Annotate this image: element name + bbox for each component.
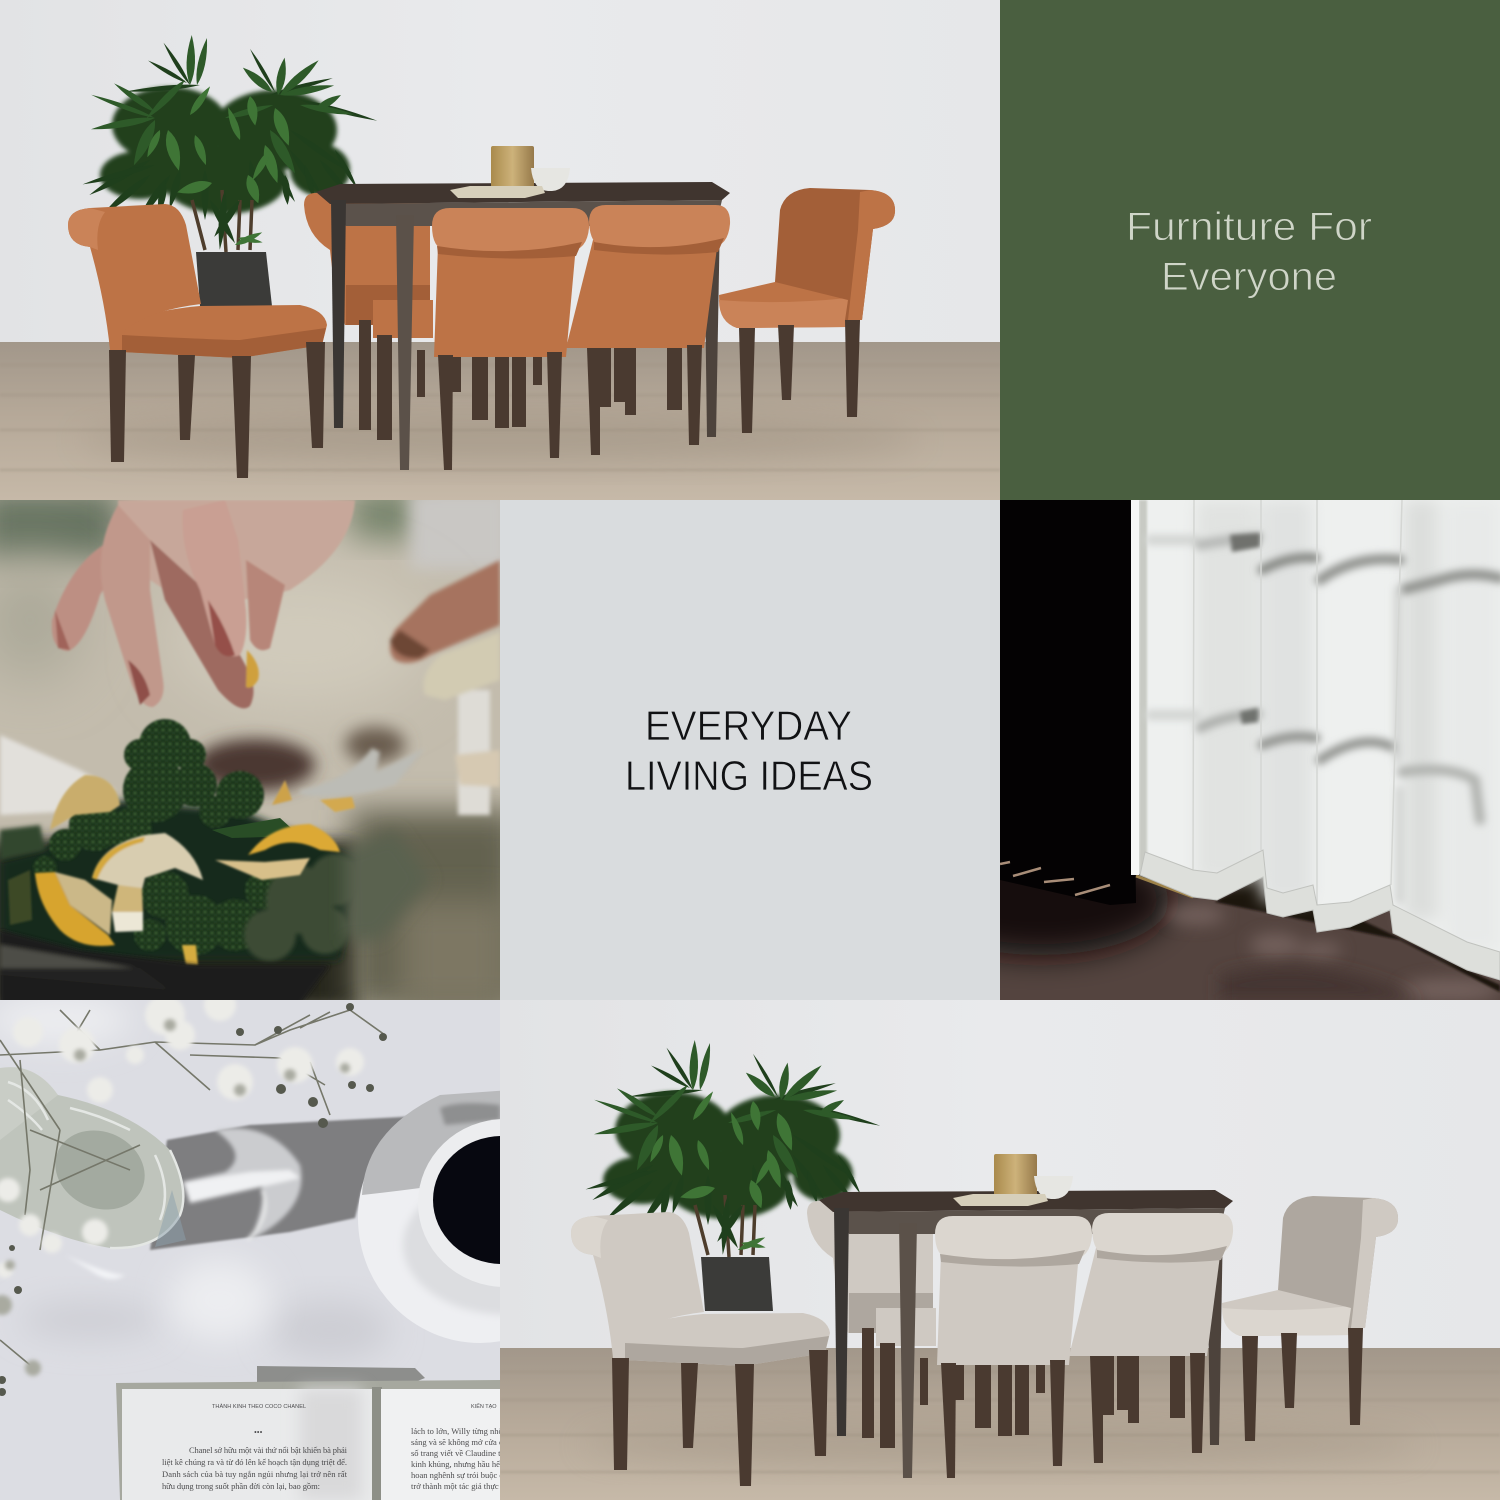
book cover shadow <box>257 1366 425 1382</box>
heading: furniture for everyone: Everyone <box>1161 255 1337 299</box>
panel: curtain photo <box>1000 500 1500 1000</box>
panel: grey title block <box>500 500 1000 1000</box>
flower buds <box>0 1003 387 1396</box>
panel: green title block <box>1000 0 1500 500</box>
food: herbs <box>0 719 430 961</box>
icon: potted plant <box>585 1040 881 1311</box>
carpet shading <box>1000 874 1186 974</box>
panel: food photo <box>0 490 520 1010</box>
book text: liệt kê chúng ra và từ đó lên kế hoạch tận dụng triệt để. <box>162 1457 347 1467</box>
book text: THÀNH KINH THEO COCO CHANEL <box>212 1403 306 1410</box>
icon: glass vase <box>0 1067 186 1248</box>
branches <box>0 1010 385 1365</box>
light caustic <box>182 1128 301 1240</box>
icon: second hand <box>390 560 500 815</box>
panel: book and coffee photo <box>0 1000 500 1500</box>
gold threshold <box>1136 876 1193 897</box>
sheer curtain <box>1131 500 1500 980</box>
baby's breath flowers <box>0 989 364 1278</box>
heading: everyday living ideas <box>625 702 873 799</box>
leather chairs and table <box>68 146 895 478</box>
curtain hem <box>1140 850 1500 980</box>
fork <box>300 748 425 796</box>
book text: kinh khủng, nhưng hầu hết các <box>411 1459 516 1469</box>
dark curtain <box>1000 500 1136 905</box>
book text: Danh sách của bà tuy ngắn ngủi nhưng lại trở nên rất <box>162 1469 348 1479</box>
book text: ••• <box>254 1428 263 1437</box>
book text: trở thành một tác giả thực <box>411 1481 499 1491</box>
panel: fabric dining set photo <box>500 1000 1500 1500</box>
book text <box>162 1403 517 1491</box>
fabric chairs and table <box>571 1154 1398 1486</box>
gap under curtain <box>1215 875 1500 992</box>
heading: furniture for everyone: Furniture For <box>1126 205 1372 249</box>
heading: furniture for everyone <box>1126 205 1372 299</box>
icon: coffee cup on saucer <box>358 1090 500 1343</box>
dark pan <box>0 930 330 1005</box>
book text: lách to lớn, Willy từng nhốt <box>411 1426 506 1436</box>
book text: KIẾN TẠO <box>471 1403 497 1410</box>
book text: hoan nghênh sự trói buộc đó <box>411 1470 508 1480</box>
light streaks on carpet <box>1000 862 1110 895</box>
panel: leather dining set photo <box>0 0 1000 500</box>
book text: hữu dụng trong suốt phần đời còn lại, bao gồm: <box>162 1481 320 1491</box>
curtain fold lines <box>1193 500 1402 905</box>
icon: hand sprinkling garnish <box>52 500 355 708</box>
book text: Chanel sở hữu một vài thứ nổi bật khiến bà phải <box>189 1445 348 1455</box>
curtain shadows <box>1150 537 1500 900</box>
icon: potted plant <box>82 35 378 306</box>
food: lemon slices <box>35 775 355 965</box>
book text: sáng và sẽ không mở cửa cho <box>411 1437 511 1447</box>
cast shadow <box>150 1116 420 1250</box>
lower dark background <box>0 840 360 1010</box>
curtain pleats <box>1198 500 1449 962</box>
book text: số trang viết về Claudine trong <box>411 1448 517 1458</box>
icon: open book <box>116 1380 517 1500</box>
heading: everyday living ideas: EVERYDAY <box>645 702 852 749</box>
carpet light patches <box>1165 905 1500 1002</box>
heading: everyday living ideas: LIVING IDEAS <box>625 752 873 799</box>
